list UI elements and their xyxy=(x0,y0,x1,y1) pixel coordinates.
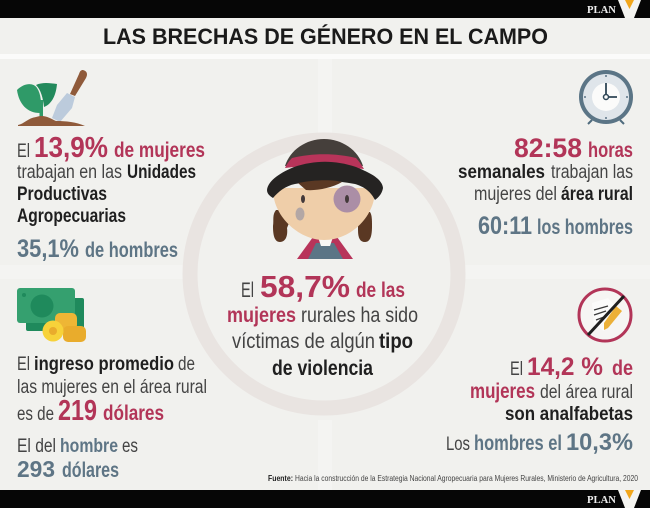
panel: women in agriculture: de hombres xyxy=(85,239,178,262)
panel: income: es de xyxy=(17,404,54,425)
panel: violence statistic: 58,7% xyxy=(260,269,350,304)
panel: income xyxy=(17,354,207,482)
panel: income: de xyxy=(178,354,195,375)
panel: women in agriculture: Agropecuarias xyxy=(17,206,126,227)
panel: illiteracy: del área rural xyxy=(540,382,633,403)
panel: women in agriculture: Productivas xyxy=(17,184,107,205)
header bar: PLAN xyxy=(587,5,617,16)
central ring xyxy=(190,140,458,408)
panel: women in agriculture: El xyxy=(17,141,30,162)
panel: income: ingreso promedio xyxy=(34,354,174,375)
panel: weekly hours: 82:58 xyxy=(514,133,582,163)
icon: banknotes and coins xyxy=(17,288,86,342)
panel: illiteracy: 10,3% xyxy=(566,429,633,456)
panel: violence statistic: tipo xyxy=(379,330,413,353)
panel: violence statistic: rurales ha sido xyxy=(301,304,418,327)
panel: income: es xyxy=(122,436,138,457)
panel: violence statistic xyxy=(227,269,418,380)
panel: women in agriculture: Unidades xyxy=(127,162,196,183)
panel: income: El xyxy=(17,354,30,375)
panel: weekly hours: trabajan las xyxy=(551,162,633,183)
panel: weekly hours xyxy=(458,133,633,240)
panel: weekly hours: 60:11 xyxy=(478,212,532,240)
header bar xyxy=(0,0,650,18)
panel: violence statistic: mujeres xyxy=(227,304,296,327)
panel: violence statistic: de violencia xyxy=(272,357,373,380)
panel: illiteracy: son analfabetas xyxy=(505,404,633,425)
panel: illiteracy: de xyxy=(612,357,633,380)
panel: income: hombre xyxy=(60,436,118,457)
footer bar: PLAN xyxy=(587,495,617,506)
panel: income: El del xyxy=(17,436,56,457)
title: LAS BRECHAS DE GÉNERO EN EL CAMPO xyxy=(103,24,548,49)
panel: income: 219 xyxy=(58,395,97,427)
panel: weekly hours: área rural xyxy=(561,184,633,205)
panel: income: dólares xyxy=(103,402,164,425)
icon: seedling and trowel xyxy=(17,70,87,126)
panel: violence statistic: víctimas de algún xyxy=(232,330,375,353)
panel: weekly hours: semanales xyxy=(458,162,545,183)
panel: income: dólares xyxy=(62,459,119,482)
panel: women in agriculture: de mujeres xyxy=(114,139,205,162)
footer bar xyxy=(0,490,650,508)
panel: weekly hours: mujeres del xyxy=(474,184,557,205)
panel: women in agriculture: 35,1% xyxy=(17,235,79,263)
panel: weekly hours: horas xyxy=(588,139,633,162)
panel: women in agriculture: trabajan en las xyxy=(17,162,122,183)
panel: illiteracy: Los xyxy=(446,434,470,455)
panel: women in agriculture xyxy=(17,132,205,263)
panel: illiteracy: hombres el xyxy=(474,432,562,455)
panel: violence statistic: El xyxy=(241,279,254,302)
icon: alarm clock xyxy=(579,70,633,124)
panel: illiteracy: 14,2 % xyxy=(527,353,603,381)
panel: women in agriculture: 13,9% xyxy=(34,132,108,164)
icon: crossed-out pencil and paper xyxy=(579,289,631,341)
panel: illiteracy xyxy=(446,353,633,456)
illustration: rural woman xyxy=(267,139,383,259)
panel: illiteracy: mujeres xyxy=(470,380,535,403)
panel: violence statistic: de las xyxy=(356,279,405,302)
panel: illiteracy: El xyxy=(510,359,523,380)
panel: income: las mujeres en el área rural xyxy=(17,377,207,398)
panel: income: 293 xyxy=(17,456,55,482)
source note: Fuente: xyxy=(268,474,293,483)
